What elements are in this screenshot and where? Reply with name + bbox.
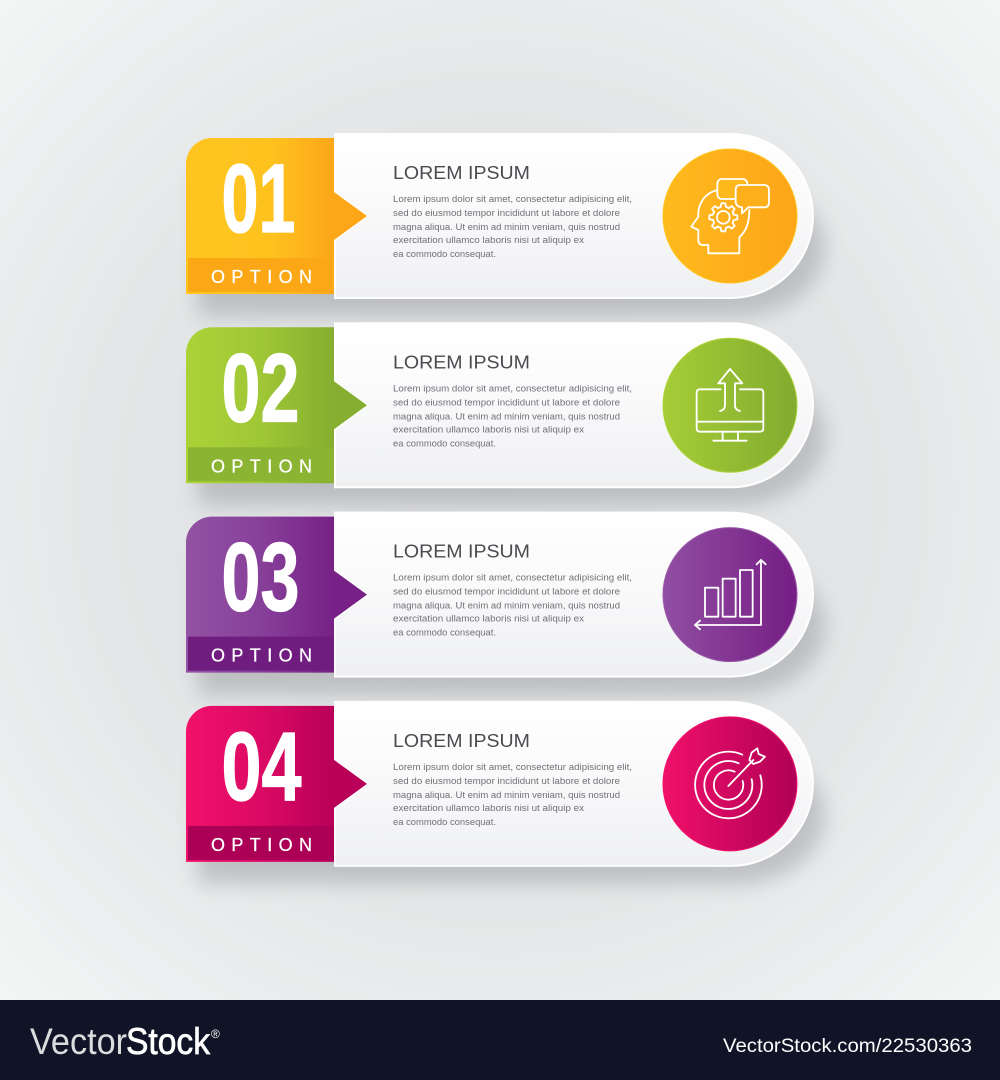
number tab 02: OPTION	[211, 456, 318, 476]
heading 04: LOREM IPSUM	[393, 730, 530, 751]
VectorStock logo: Vector	[30, 1021, 127, 1062]
body text 04: sed do eiusmod tempor incididunt ut labore et dolore	[393, 776, 620, 787]
number tab 01: 01	[222, 144, 296, 253]
body text 01	[393, 194, 632, 260]
body text 01: magna aliqua. Ut enim ad minim veniam, quis nostrud	[393, 222, 620, 233]
number tab 03: 03	[222, 523, 300, 632]
body text 02: Lorem ipsum dolor sit amet, consectetur adipisicing elit,	[393, 383, 632, 394]
heading 01: LOREM IPSUM	[393, 162, 530, 183]
body text 04: ea commodo consequat.	[393, 817, 496, 828]
number tab 03	[186, 517, 334, 673]
body text 02: sed do eiusmod tempor incididunt ut labore et dolore	[393, 397, 620, 408]
body text 01: ea commodo consequat.	[393, 249, 496, 260]
pointer 04	[334, 760, 367, 808]
body text 02: ea commodo consequat.	[393, 438, 496, 449]
icon: monitor with upload arrow	[663, 338, 797, 472]
body text 01: exercitation ullamco laboris nisi ut aliquip ex	[393, 235, 584, 246]
content card 01	[335, 134, 813, 298]
number tab 04: 04	[222, 712, 302, 821]
body text 02: magna aliqua. Ut enim ad minim veniam, quis nostrud	[393, 411, 620, 422]
body text 01: Lorem ipsum dolor sit amet, consectetur adipisicing elit,	[393, 194, 632, 205]
body text 04	[393, 762, 632, 828]
body text 02	[393, 383, 632, 449]
content card 03	[335, 513, 813, 677]
heading 03: LOREM IPSUM	[393, 541, 530, 562]
body text 04: Lorem ipsum dolor sit amet, consectetur adipisicing elit,	[393, 762, 632, 773]
panel: option 01	[186, 134, 825, 316]
footer bar	[0, 1000, 1000, 1080]
content card 04	[335, 702, 813, 866]
image id: VectorStock.com/22530363	[723, 1035, 972, 1057]
content card 02	[335, 323, 813, 487]
body text 01: sed do eiusmod tempor incididunt ut labore et dolore	[393, 208, 620, 219]
number tab 04: OPTION	[211, 835, 318, 855]
pointer 03	[334, 571, 367, 619]
number tab 02: 02	[222, 333, 300, 442]
body text 03: magna aliqua. Ut enim ad minim veniam, quis nostrud	[393, 601, 620, 612]
number tab 01: OPTION	[211, 267, 318, 287]
number tab 01	[186, 138, 334, 294]
pointer 02	[334, 381, 367, 429]
icon: target with arrow	[663, 717, 797, 851]
pointer 01	[334, 192, 367, 240]
body text 03: ea commodo consequat.	[393, 628, 496, 639]
panel: option 03	[186, 513, 825, 695]
number tab 03: OPTION	[211, 646, 318, 666]
body text 03: Lorem ipsum dolor sit amet, consectetur adipisicing elit,	[393, 573, 632, 584]
icon: head with gear and speech bubbles	[663, 149, 797, 283]
body text 03	[393, 573, 632, 639]
number tab 04	[186, 706, 334, 862]
VectorStock logo: ®	[211, 1027, 220, 1041]
body text 04: magna aliqua. Ut enim ad minim veniam, quis nostrud	[393, 790, 620, 801]
icon: rising bar chart	[663, 528, 797, 662]
number tab 02	[186, 327, 334, 483]
body text 03: sed do eiusmod tempor incididunt ut labore et dolore	[393, 587, 620, 598]
heading 02: LOREM IPSUM	[393, 351, 530, 372]
VectorStock logo: Stock	[126, 1021, 210, 1062]
panel: option 04	[186, 702, 825, 884]
panel: option 02	[186, 323, 825, 505]
VectorStock logo	[30, 1021, 220, 1062]
body text 03: exercitation ullamco laboris nisi ut aliquip ex	[393, 614, 584, 625]
body text 02: exercitation ullamco laboris nisi ut aliquip ex	[393, 424, 584, 435]
body text 04: exercitation ullamco laboris nisi ut aliquip ex	[393, 803, 584, 814]
